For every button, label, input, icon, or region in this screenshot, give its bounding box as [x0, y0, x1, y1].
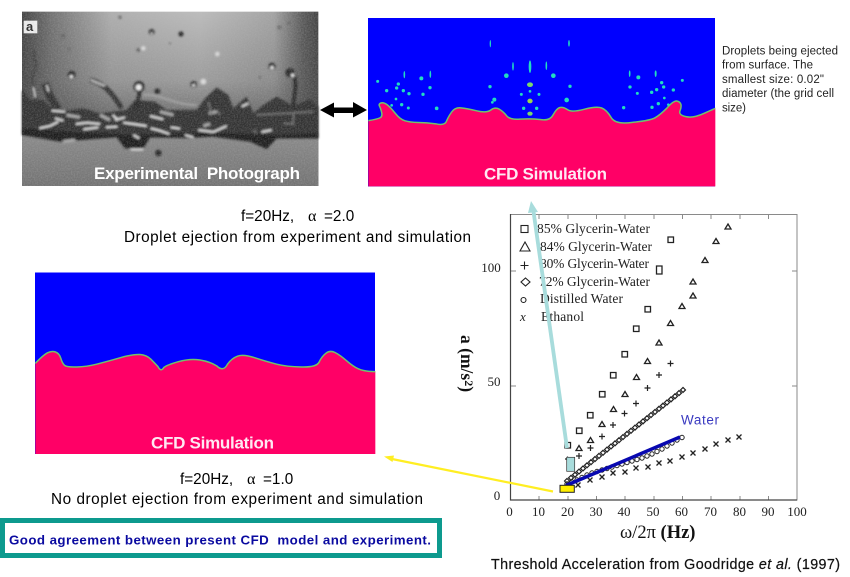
conditions text: lower [51, 471, 423, 508]
panel: CFD simulation without droplets [35, 272, 375, 454]
photo caption: Experimental Photograph [94, 164, 300, 183]
legend: 84% Glycerin-Water [540, 239, 652, 254]
marker: yellow box [560, 485, 574, 492]
conditions text: lower: =1.0 [263, 471, 293, 488]
droplet annotation: diameter (the grid cell [722, 88, 834, 100]
droplet annotation [722, 46, 838, 114]
series: distilled water circles [565, 435, 684, 486]
panel: CFD simulation with droplets [368, 18, 715, 186]
water label: Water [681, 412, 720, 428]
conditions text: lower: No droplet ejection from experiment and simulation [51, 491, 423, 508]
tick labels: 0 [494, 488, 500, 503]
callout: conclusion [2, 520, 440, 556]
tick labels: 60 [675, 504, 688, 519]
tick labels: 10 [532, 504, 545, 519]
tick labels: 80 [733, 504, 746, 519]
label box a [24, 21, 37, 33]
chart: threshold acceleration [457, 214, 807, 543]
tick labels: 90 [762, 504, 774, 519]
y axis title: 2 [462, 380, 476, 386]
droplets [376, 40, 684, 116]
tick labels: 30 [590, 504, 602, 519]
series: squares [565, 237, 674, 448]
series: diamonds [564, 387, 686, 484]
double-headed arrow [320, 102, 367, 118]
tick labels [481, 260, 807, 519]
tick labels: 0 [506, 504, 513, 519]
conditions text: upper: Droplet ejection from experiment and simulation [124, 229, 471, 246]
film grain [22, 12, 318, 186]
conditions text: upper: =2.0 [324, 208, 354, 225]
tick labels: 70 [704, 504, 717, 519]
tick labels: 50 [488, 374, 500, 389]
legend: 72% Glycerin-Water [539, 274, 650, 289]
tick labels: 20 [561, 504, 574, 519]
tick labels: 100 [787, 504, 807, 519]
legend: 80% Glycerin-Water [540, 256, 650, 271]
photo: experimental photograph [22, 12, 318, 186]
tick labels: 100 [481, 260, 501, 275]
tick labels: 50 [646, 504, 660, 519]
y axis title: ) [457, 386, 477, 392]
caption: CFD Simulation [484, 164, 607, 184]
caption: CFD Simulation [151, 434, 274, 452]
droplet annotation: Droplets being ejected [722, 46, 838, 58]
conditions text: upper [124, 208, 471, 246]
legend: Ethanol [541, 309, 584, 324]
series: ethanol crosses [576, 434, 742, 488]
conditions text: upper: f=20Hz, [241, 208, 294, 225]
conditions text: lower: f=20Hz, [180, 471, 233, 488]
droplet annotation: from surface. The [722, 60, 813, 72]
tick labels: 40 [618, 504, 630, 519]
droplet annotation: smallest size: 0.02" [722, 74, 824, 86]
water line highlight [566, 437, 680, 486]
legend: x [519, 309, 526, 324]
series: plus [565, 360, 674, 462]
splash highlights [39, 111, 193, 137]
droplets [68, 29, 295, 156]
axes frame [510, 214, 797, 500]
y axis title: a (m/s [457, 335, 477, 380]
callout: conclusion: Good agreement between present CFD model and experiment. [9, 532, 431, 548]
series: triangles [576, 224, 731, 450]
droplet annotation: size) [722, 102, 746, 114]
arrow: yellow to lower simulation [384, 456, 553, 492]
x axis title: ω/2π (Hz) [620, 523, 695, 543]
marker: light blue box [567, 457, 575, 471]
legend [519, 221, 652, 324]
conditions text: lower: α [247, 471, 256, 488]
arrow: light blue to upper simulation [528, 201, 567, 448]
photo: experimental photograph: a [26, 19, 34, 34]
legend: Distilled Water [540, 291, 624, 306]
conditions text: upper: α [308, 208, 317, 225]
chart source caption: Threshold Acceleration from Goodridge et al. (1997) [491, 557, 840, 573]
legend: 85% Glycerin-Water [537, 221, 650, 236]
